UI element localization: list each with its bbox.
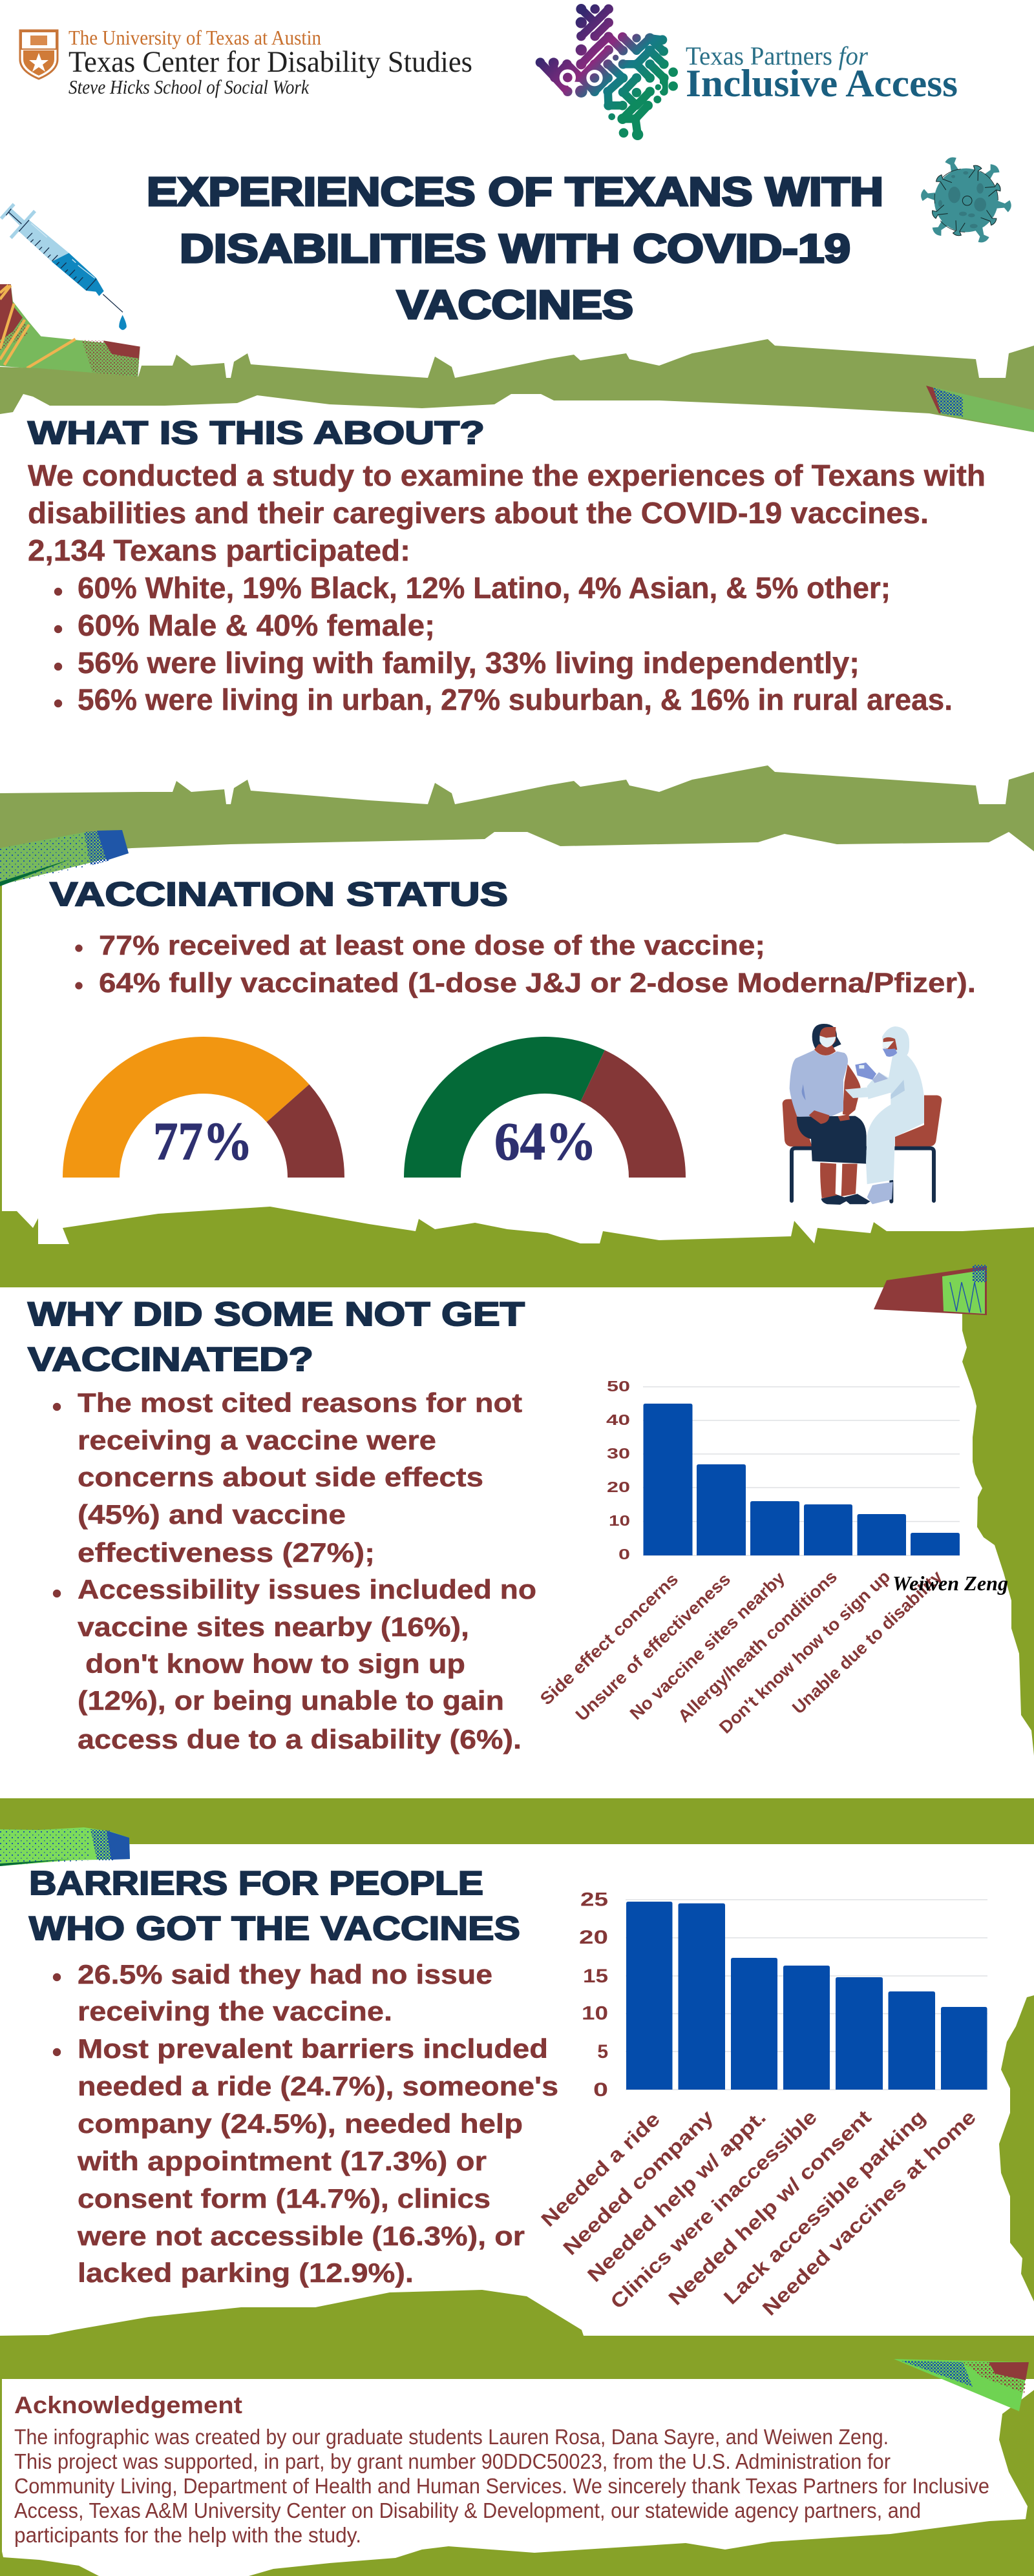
reasons bullets: receiving a vaccine were (78, 1425, 436, 1455)
title: VACCINES (397, 283, 633, 327)
bar chart: barriers: 10 (582, 2002, 608, 2024)
logo: Texas Partners for Inclusive Access (536, 4, 958, 140)
decoration: top right brush patch acknowledgement (894, 2359, 1029, 2411)
bar chart: barriers: Lack accessible parking (719, 2106, 930, 2309)
partner line one: Texas Partners for (686, 41, 868, 70)
band: green footer background (0, 2290, 1034, 2576)
band: olive torn strip top (0, 339, 1034, 432)
gauge: 64 percent: 64% (494, 1112, 596, 1172)
demographic bullets: 60% White, 19% Black, 12% Latino, 4% Asian, & 5% other; (78, 571, 891, 605)
bar chart: reasons for not vaccinating: Side effect concerns (536, 1570, 682, 1709)
acknowledgement text: Community Living, Department of Health and Human Services. We sincerely thank Texas Partners for Inclusive (14, 2474, 989, 2498)
panel: why did some not get vaccinated (28, 1296, 1008, 1754)
intro paragraph: We conducted a study to examine the experiences of Texans with (28, 459, 986, 492)
reasons bullets: concerns about side effects (78, 1462, 483, 1492)
decoration: left brush patch vaccination status (0, 830, 129, 886)
bar chart: barriers: Needed vaccines at home (758, 2106, 980, 2320)
title: EXPERIENCES OF TEXANS WITH (147, 170, 883, 214)
reasons bullets: vaccine sites nearby (16%), (78, 1612, 469, 1642)
icon: syringe (1, 204, 127, 330)
center name: Texas Center for Disability Studies (69, 45, 472, 79)
panel: vaccination status (50, 876, 976, 1205)
barrier bullets: receiving the vaccine. (78, 1996, 392, 2026)
icon: UT shield (20, 30, 58, 79)
reasons bullets (53, 1387, 536, 1754)
acknowledgement text: This project was supported, in part, by grant number 90DDC50023, from the U.S. Administration for (14, 2449, 891, 2473)
heading: Acknowledgement (14, 2392, 242, 2418)
heading: WHY DID SOME NOT GET (28, 1296, 525, 1333)
reasons bullets: access due to a disability (6%). (78, 1724, 522, 1754)
barrier bullets: with appointment (17.3%) or (77, 2146, 487, 2176)
bar chart: barriers: Clinics were inaccessible (606, 2106, 821, 2313)
school name: Steve Hicks School of Social Work (69, 76, 310, 98)
reasons bullets: (12%), or being unable to gain (78, 1685, 504, 1716)
panel: acknowledgement white paper (2, 2379, 1034, 2576)
bar chart: reasons for not vaccinating: 40 (606, 1411, 630, 1428)
bar chart: barriers: Needed help w/ appt. (583, 2106, 770, 2287)
demographic bullets: 56% were living in urban, 27% suburban, & 16% in rural areas. (78, 683, 953, 716)
panel: acknowledgement (14, 2392, 989, 2547)
acknowledgement text: The infographic was created by our graduate students Lauren Rosa, Dana Sayre, and Weiwen Zeng. (14, 2425, 889, 2449)
heading (29, 1865, 520, 1948)
heading: VACCINATION STATUS (50, 876, 508, 913)
bar chart: barriers: Needed a ride (536, 2108, 664, 2231)
bar chart: reasons for not vaccinating: 20 (607, 1479, 630, 1495)
partner line two: Inclusive Access (686, 62, 958, 105)
intro paragraph: disabilities and their caregivers about the COVID-19 vaccines. (28, 496, 929, 530)
gauge: 77 percent (63, 1037, 344, 1178)
band: green torn strip below vaccination status (0, 1207, 1034, 1287)
bar chart: reasons for not vaccinating: 0 (618, 1546, 630, 1563)
reasons bullets: The most cited reasons for not (78, 1387, 522, 1418)
decoration: right top brush patch (926, 386, 1034, 432)
demographic bullets (54, 571, 953, 716)
panel: barriers for people who got the vaccines (29, 1865, 987, 2320)
logo: UT Texas Center for Disability Studies (20, 26, 472, 98)
bar chart: barriers: Needed company (558, 2105, 718, 2259)
band: olive torn strip above vaccination status (0, 765, 1034, 859)
signature: Weiwen Zeng (892, 1572, 1008, 1595)
intro paragraph (28, 459, 986, 567)
bar chart: barriers (536, 1889, 987, 2320)
decoration: top right brush patch section three (874, 1265, 987, 1315)
title: DISABILITIES WITH COVID-19 (180, 227, 850, 271)
bar chart: reasons for not vaccinating: Unsure of effectiveness (572, 1570, 734, 1725)
heading (28, 1296, 525, 1378)
demographic bullets: 56% were living with family, 33% living independently; (78, 646, 860, 680)
bar chart: barriers: 25 (580, 1889, 608, 1911)
bar chart: reasons for not vaccinating: 30 (607, 1445, 630, 1462)
acknowledgement text: Access, Texas A&M University Center on Disability & Development, our statewide agency partners, and (14, 2498, 921, 2522)
bar chart: reasons for not vaccinating: 50 (607, 1378, 630, 1395)
barrier bullets: company (24.5%), needed help (78, 2108, 523, 2139)
bar chart: reasons for not vaccinating: No vaccine sites nearby (626, 1568, 788, 1723)
reasons bullets: Accessibility issues included no (78, 1574, 536, 1605)
bar chart: barriers: 20 (579, 1927, 608, 1948)
bar chart: barriers: 15 (583, 1966, 608, 1987)
barrier bullets: lacked parking (12.9%). (78, 2258, 414, 2288)
intro paragraph: 2,134 Texans participated: (28, 534, 410, 567)
bar chart: barriers: 5 (597, 2041, 608, 2062)
barrier bullets: needed a ride (24.7%), someone's (78, 2071, 558, 2101)
icon: healthcare worker vaccinating seated woman (783, 1024, 942, 1205)
band: green strip above barriers (0, 1798, 1034, 1844)
panel: what is this about (28, 415, 986, 716)
bar chart: reasons for not vaccinating: Unable due to disability (788, 1567, 946, 1718)
bar chart: reasons for not vaccinating (536, 1378, 960, 1738)
title (147, 170, 883, 327)
heading: WHO GOT THE VACCINES (29, 1910, 520, 1948)
bar chart: reasons for not vaccinating: Allergy/heath conditions (674, 1567, 841, 1726)
bar chart: reasons for not vaccinating: 10 (609, 1512, 630, 1529)
status bullets: 77% received at least one dose of the vaccine; (99, 930, 765, 961)
heading: WHAT IS THIS ABOUT? (28, 415, 485, 451)
gauge: 77 percent: 77% (153, 1112, 253, 1172)
UT name: The University of Texas at Austin (69, 26, 321, 49)
reasons bullets: (45%) and vaccine (78, 1499, 346, 1530)
acknowledgement text: participants for the help with the study. (14, 2523, 361, 2547)
heading: VACCINATED? (28, 1341, 313, 1378)
left edge strip (0, 859, 2, 1221)
gauge: 64 percent (404, 1037, 686, 1178)
decoration: left top brush patch (0, 284, 140, 377)
reasons bullets: effectiveness (27%); (78, 1537, 375, 1568)
barrier bullets: 26.5% said they had no issue (78, 1959, 492, 1989)
demographic bullets: 60% Male & 40% female; (78, 608, 435, 642)
barrier bullets: Most prevalent barriers included (78, 2033, 548, 2064)
icon: virus (920, 156, 1012, 244)
icon: dotted Texas map (536, 4, 678, 140)
barrier bullets: were not accessible (16.3%), or (77, 2221, 525, 2251)
bar chart: barriers: Needed help w/ consent (664, 2106, 876, 2310)
bar chart: reasons for not vaccinating: Don't know how to sign up (715, 1567, 894, 1738)
barrier bullets (53, 1959, 558, 2288)
decoration: left brush patch barriers (0, 1827, 130, 1866)
heading: BARRIERS FOR PEOPLE (29, 1865, 483, 1902)
band: green right edge of section three (962, 1287, 1034, 1756)
status bullets (75, 930, 976, 999)
bar chart: barriers: 0 (593, 2079, 608, 2101)
band: green right edge of section four (999, 1995, 1034, 2301)
reasons bullets: don't know how to sign up (85, 1648, 465, 1679)
barrier bullets: consent form (14.7%), clinics (78, 2183, 491, 2214)
status bullets: 64% fully vaccinated (1-dose J&J or 2-dose Moderna/Pfizer). (99, 968, 976, 999)
acknowledgement text (14, 2425, 989, 2547)
